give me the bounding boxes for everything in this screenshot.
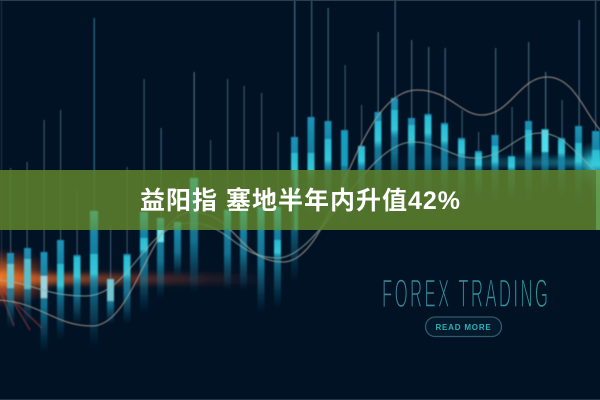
glow: orange light flare — [0, 248, 275, 330]
heading: FOREX TRADING: FOREX TRADING — [382, 272, 548, 316]
candlestick chart — [1, 0, 596, 280]
green title band — [0, 170, 600, 230]
band right edge highlight — [596, 170, 600, 230]
bright candle highlights — [7, 110, 600, 301]
candle bodies and highlights — [7, 98, 600, 352]
wave line: upper trend curve — [0, 77, 600, 326]
button: READ MORE: READ MORE — [435, 323, 492, 332]
button: READ MORE — [426, 317, 502, 336]
glow: cyan light flare — [395, 141, 600, 189]
candle bodies — [7, 98, 600, 352]
title: 益阳指 塞地半年内升值42% — [140, 187, 461, 215]
green candles seen through the band — [90, 170, 298, 230]
wicks — [1, 0, 596, 280]
wave line: lower trend curve — [0, 133, 600, 296]
